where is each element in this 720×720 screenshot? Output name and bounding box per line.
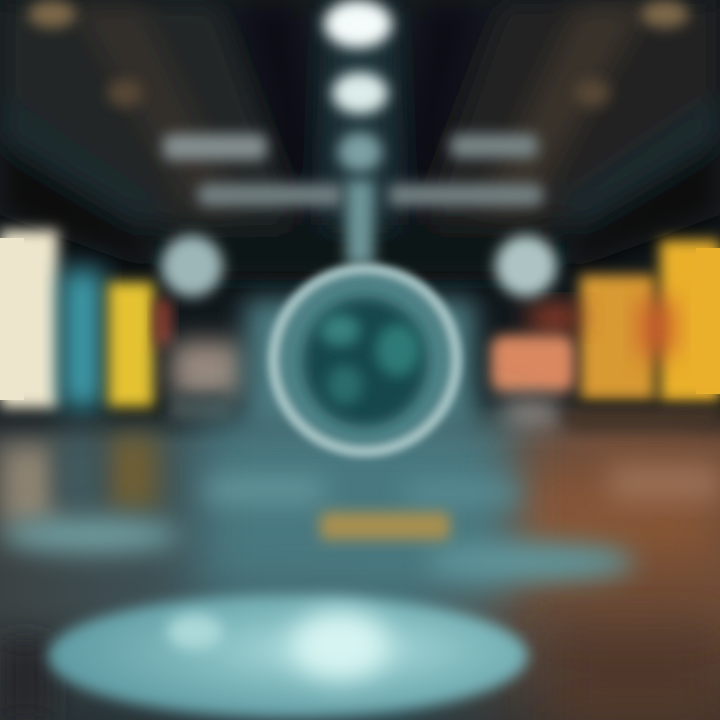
heading: blurred title text blocks	[163, 134, 543, 206]
panel: left coloured wall	[0, 230, 245, 420]
floor: left, centre and right reflections	[0, 420, 720, 720]
ceiling: perspective beams	[0, 0, 720, 280]
ceiling lights	[28, 0, 689, 172]
floor band: teal steps	[0, 478, 635, 582]
central light column	[346, 180, 374, 265]
panel: right coloured wall	[490, 240, 720, 432]
icon: left circle	[161, 235, 223, 297]
pool: large glowing ellipse	[48, 594, 528, 718]
icon: central ring with teal globe	[245, 268, 475, 452]
icon: right circle	[495, 235, 557, 297]
label: gold blurred banner	[320, 512, 450, 540]
